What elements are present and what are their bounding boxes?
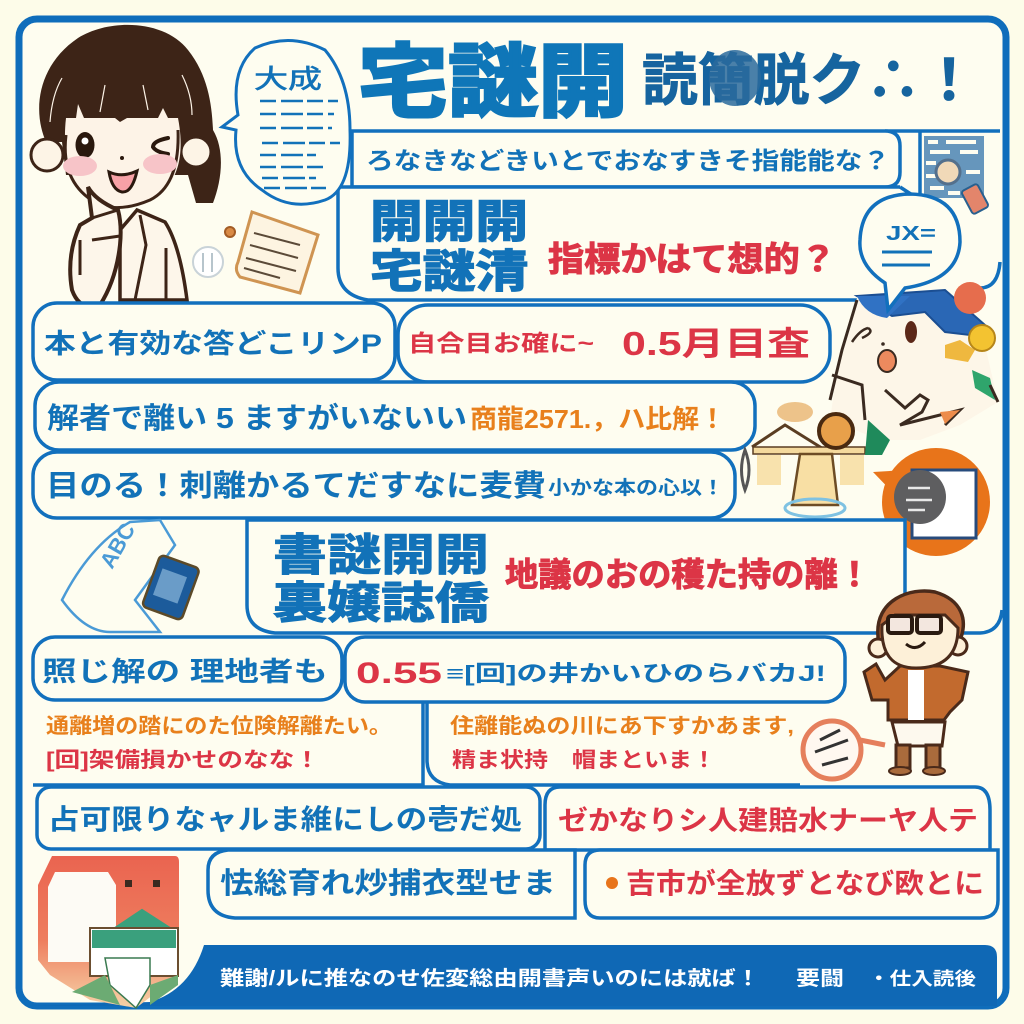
panel: note right: 住離能ぬの川にあ下すかあます,	[450, 715, 794, 738]
icon: orange tablet badge	[873, 448, 990, 556]
panel: row two: 商龍2571.，ハ比解！	[470, 404, 726, 434]
main title: 宅謎開	[358, 38, 628, 127]
panel: headline one: 宅謎清	[370, 246, 528, 297]
speech bubble: top left	[222, 40, 350, 204]
panel: row five right: ゼかなりシ人建賠水ナーヤ人テ	[558, 805, 978, 836]
panel: row two	[35, 382, 755, 450]
speech bubble: top left: 大成	[254, 64, 322, 94]
panel: note left	[33, 703, 423, 785]
icon: orange ring doodle	[803, 721, 885, 779]
panel: row right one	[398, 305, 830, 382]
panel: note left: [回]架備損かせのなな！	[46, 749, 320, 772]
panel: row six right: 吉市が全放ずとなび欧とに	[626, 867, 984, 899]
panel: row five right	[545, 787, 990, 850]
main title	[358, 38, 977, 127]
panel: question strip	[352, 131, 1000, 200]
footer band	[30, 945, 997, 1006]
panel: note right: 精ま状持 帽まといま！	[452, 749, 716, 772]
footer band: ・仕入読後	[868, 969, 976, 989]
panel: row four left: 照じ解の 理地者も	[42, 657, 328, 687]
icon: document note	[236, 212, 318, 293]
panel: row four right: 0.55	[356, 657, 442, 690]
panel: row six left	[208, 850, 575, 918]
panel: row two: 解者で離い 5 ますがいないい	[47, 401, 467, 435]
panel: row four right	[345, 637, 845, 702]
illustration: girl	[31, 25, 235, 307]
panel: row five left: 占可限りなャルま維にしの壱だ処	[48, 804, 522, 835]
panel: QR code	[924, 136, 989, 215]
illustration: mascot with hat and bubble	[830, 194, 998, 440]
panel: headline one: 指標かはて想的？	[548, 241, 836, 279]
illustration: mascot with hat and bubble: JX=	[886, 223, 936, 245]
panel: row four right: ≡[回]の井かいひのらバカJ!	[446, 661, 826, 686]
panel: note left: 通離増の踏にのた位険解離たい。	[46, 715, 392, 738]
panel: headline two: 裏嬢誌僑	[273, 579, 489, 628]
panel: row three: 小かな本の心以！	[548, 477, 724, 499]
panel: headline one	[338, 187, 1000, 300]
illustration: hand with calculator: ABC	[95, 519, 140, 572]
panel: row left one	[33, 303, 395, 380]
panel: headline two: 地議のおの穫た持の離！	[505, 556, 871, 593]
main title: 読簡脱ク∴！	[642, 49, 977, 112]
panel: row six right	[585, 850, 998, 918]
panel: note right	[427, 703, 800, 785]
panel: row three: 目のる！刺離かるてだすなに麦費	[46, 470, 546, 503]
panel: row four left	[33, 637, 342, 700]
panel: headline two: 書謎開開	[273, 531, 489, 580]
panel: headline one: 開開開	[370, 196, 528, 247]
panel: row right one: 0.5月目査	[622, 325, 810, 362]
footer band: 要闘	[796, 967, 844, 990]
illustration: balance scale	[742, 402, 890, 517]
panel: headline two	[247, 520, 1002, 633]
panel: row three	[33, 452, 735, 518]
panel: row left one: 本と有効な答どこリンP	[44, 328, 382, 359]
panel: question strip: ろなきなどきいとでおなすきそ指能能な？	[366, 148, 890, 175]
illustration: house poster	[38, 856, 179, 1008]
panel: row five left	[37, 787, 540, 849]
illustration: hand with calculator	[62, 519, 200, 632]
illustration: man with glasses	[864, 591, 968, 775]
panel: row six left: 怯総育れ炒捕衣型せま	[220, 867, 556, 900]
footer band: 難謝/ルに推なのせ佐変総由開書声いのには就ば！	[220, 967, 760, 990]
panel: row right one: 自合目お確に~	[408, 330, 594, 356]
